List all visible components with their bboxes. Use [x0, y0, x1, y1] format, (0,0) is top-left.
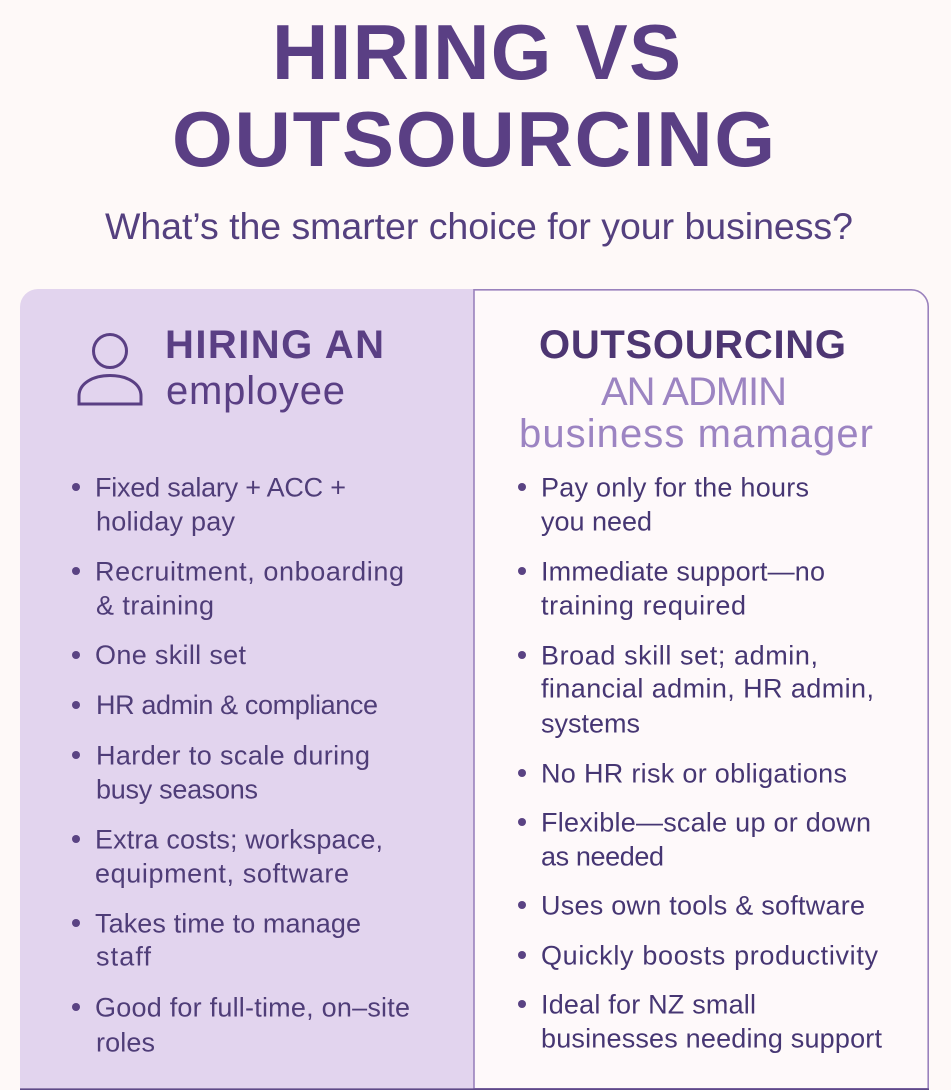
list: hiring points: Recruitment, onboarding: [95, 556, 404, 586]
icon: person: [79, 334, 141, 404]
title: [172, 8, 775, 183]
list: outsourcing points: systems: [541, 708, 640, 738]
list: hiring points: holiday pay: [96, 506, 236, 536]
list: outsourcing points: Quickly boosts productivity: [541, 940, 878, 970]
list: outsourcing points: businesses needing support: [541, 1024, 882, 1054]
list: hiring points: Harder to scale during: [96, 740, 370, 770]
list: hiring points: Good for full-time, on–site: [95, 992, 410, 1022]
list: outsourcing points: No HR risk or obligations: [541, 758, 847, 788]
list: outsourcing points: Immediate support—no: [541, 556, 825, 586]
list: outsourcing points: you need: [541, 506, 652, 536]
list: hiring points: Fixed salary + ACC +: [95, 472, 346, 502]
list: hiring points: busy seasons: [96, 774, 258, 804]
heading: hiring an employee: employee: [166, 369, 345, 413]
list: outsourcing points: training required: [541, 590, 746, 620]
list: outsourcing points: [518, 472, 882, 1054]
panel: hiring an employee: [20, 289, 474, 1090]
list: hiring points: One skill set: [95, 640, 246, 670]
list: hiring points: equipment, software: [95, 858, 349, 888]
list: hiring points: [72, 472, 410, 1058]
list: hiring points: Takes time to manage: [95, 908, 361, 938]
list: outsourcing points: Flexible—scale up or down: [541, 808, 871, 838]
heading: hiring an employee: [165, 323, 384, 413]
list: hiring points: & training: [96, 590, 214, 620]
list: hiring points: Extra costs; workspace,: [95, 824, 383, 854]
title: OUTSOURCING: [172, 95, 775, 183]
list: hiring points: roles: [96, 1028, 155, 1058]
list: outsourcing points: as needed: [541, 842, 664, 872]
subtitle: What’s the smarter choice for your business?: [105, 205, 853, 247]
list: outsourcing points: financial admin, HR admin,: [541, 674, 874, 704]
heading: outsourcing: [519, 323, 873, 456]
list: hiring points: HR admin & compliance: [96, 690, 378, 720]
list: hiring points: staff: [96, 942, 151, 972]
list: outsourcing points: Broad skill set; admin,: [541, 640, 818, 670]
list: outsourcing points: Ideal for NZ small: [541, 990, 756, 1020]
panel: outsourcing an admin business manager: [20, 290, 929, 1089]
heading: hiring an employee: HIRING AN: [165, 323, 384, 367]
list: outsourcing points: Pay only for the hours: [541, 472, 809, 502]
heading: outsourcing: business mamager: [519, 412, 873, 456]
heading: outsourcing: AN ADMIN: [601, 370, 787, 414]
heading: outsourcing: OUTSOURCING: [539, 323, 846, 367]
list: outsourcing points: Uses own tools & software: [541, 890, 865, 920]
title: HIRING VS: [272, 8, 681, 96]
